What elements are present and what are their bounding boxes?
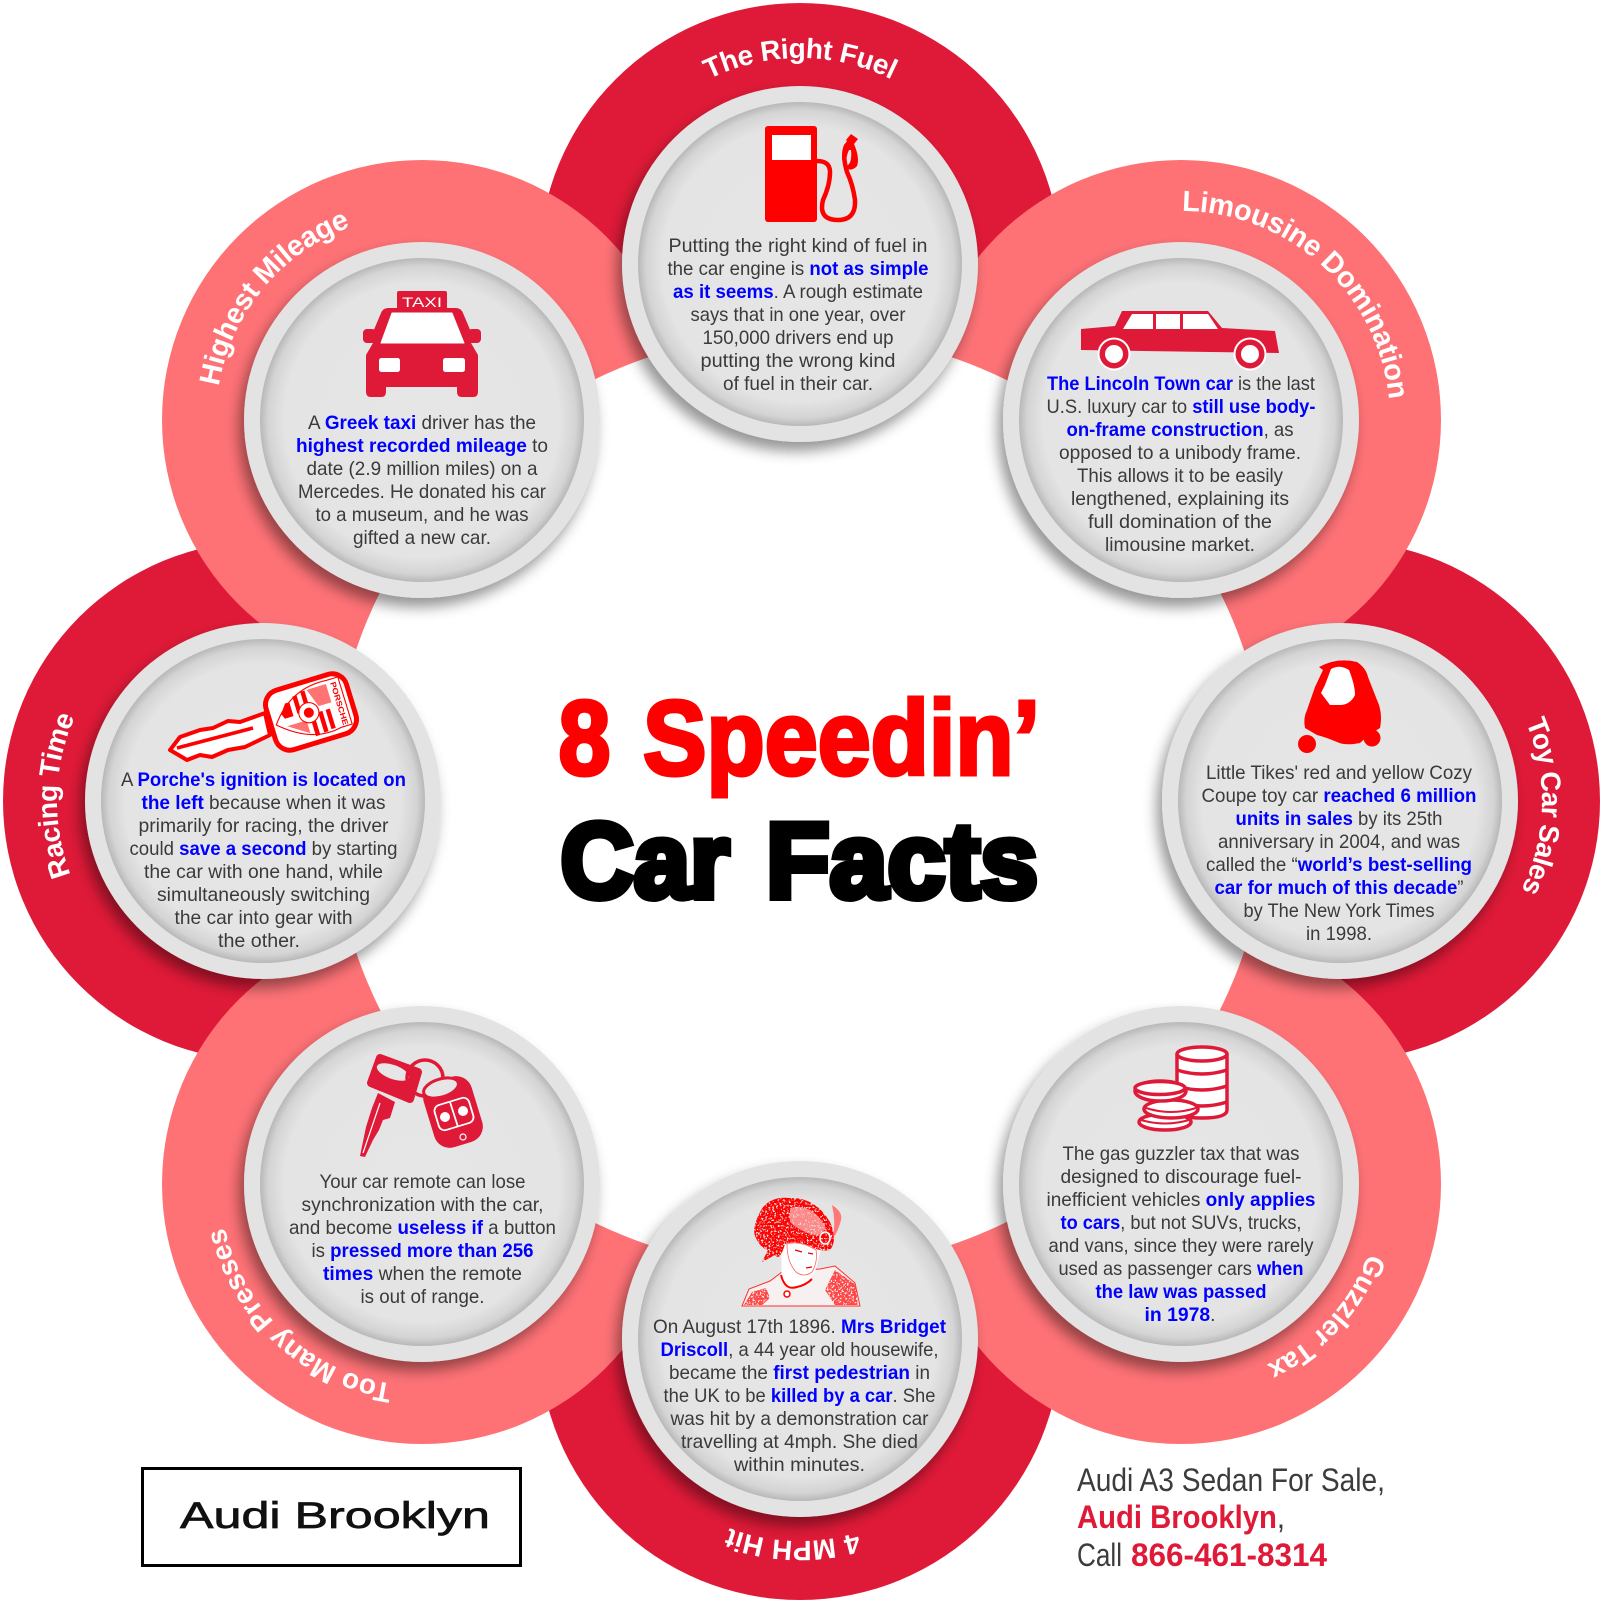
title: [558, 680, 1040, 920]
text: limousine domination: [1046, 373, 1316, 556]
panel: 4 mph hit: [608, 1160, 982, 1560]
text: limousine domination: The Lincoln Town car is the last: [1047, 373, 1316, 395]
text: too many presses: is out of range.: [360, 1286, 484, 1308]
contact text: 866-461-8314: [1131, 1537, 1327, 1573]
text: 4 mph hit: [653, 1316, 946, 1476]
text: toy car sales: Little Tikes' red and yellow Cozy: [1206, 762, 1472, 784]
circle: toy car sales: [1162, 623, 1518, 979]
text: 4 mph hit: became the first pedestrian in: [669, 1362, 930, 1384]
text: too many presses: and become useless if a button: [289, 1217, 556, 1239]
text: the right fuel: putting the wrong kind: [700, 350, 896, 372]
label: Highest Mileage: Highest Mileage: [199, 214, 348, 384]
title: Speedin’: [643, 680, 1040, 798]
text: racing time: primarily for racing, the driver: [138, 815, 389, 837]
label: Racing Time: Racing Time: [38, 714, 73, 880]
text: limousine domination: This allows it to be easily: [1077, 465, 1283, 487]
text: toy car sales: in 1998.: [1306, 923, 1372, 945]
text: guzzler tax: used as passenger cars when: [1058, 1258, 1304, 1280]
text: highest mileage: gifted a new car.: [353, 527, 491, 549]
text: too many presses: synchronization with the car,: [302, 1194, 544, 1216]
text: racing time: the left because when it was: [142, 792, 386, 814]
text: highest mileage: A Greek taxi driver has the: [308, 412, 536, 434]
text: limousine domination: limousine market.: [1105, 534, 1255, 556]
text: the right fuel: 150,000 drivers end up: [702, 327, 894, 349]
panel: limousine domination: [988, 190, 1404, 616]
icon: coin stacks: [1135, 1047, 1227, 1130]
icon: toy car: [1298, 660, 1381, 753]
text: highest mileage: Mercedes. He donated his car: [298, 481, 546, 503]
text: highest mileage: date (2.9 million miles) on a: [306, 458, 538, 480]
text: the right fuel: the car engine is not as simple: [668, 258, 929, 280]
text: toy car sales: anniversary in 2004, and was: [1218, 831, 1460, 853]
contact text: Call: [1077, 1537, 1122, 1573]
text: 4 mph hit: the UK to be killed by a car. She: [664, 1385, 936, 1407]
logo box: Audi Brooklyn: [142, 1468, 520, 1566]
text: guzzler tax: [1046, 1143, 1316, 1326]
panel: racing time: [38, 623, 446, 998]
icon: porsche key: PORSCHE: [328, 681, 350, 726]
text: highest mileage: to a museum, and he was: [316, 504, 529, 526]
text: limousine domination: lengthened, explaining its: [1071, 488, 1289, 510]
label: Limousine Domination: Limousine Domination: [1184, 190, 1404, 398]
text: toy car sales: Coupe toy car reached 6 million: [1202, 785, 1476, 807]
label: The Right Fuel: The Right Fuel: [701, 38, 898, 79]
text: toy car sales: car for much of this decade”: [1214, 877, 1463, 899]
text: guzzler tax: the law was passed: [1096, 1281, 1266, 1303]
contact text: [1077, 1462, 1385, 1573]
panel: the right fuel: [608, 38, 982, 460]
icon: taxi: TAXI: [402, 294, 442, 310]
circle: the right fuel: [622, 86, 978, 442]
text: 4 mph hit: Driscoll, a 44 year old housewife,: [660, 1339, 938, 1361]
text: racing time: simultaneously switching: [157, 884, 370, 906]
text: racing time: [121, 769, 406, 952]
text: the right fuel: of fuel in their car.: [723, 373, 873, 395]
text: racing time: the other.: [218, 930, 300, 952]
text: limousine domination: full domination of the: [1088, 511, 1272, 533]
title: Car: [560, 800, 730, 920]
text: guzzler tax: in 1978.: [1144, 1304, 1216, 1326]
text: racing time: A Porche's ignition is located on: [121, 769, 406, 791]
logo box: Audi Brooklyn: Audi Brooklyn: [180, 1495, 490, 1536]
text: toy car sales: units in sales by its 25th: [1236, 808, 1442, 830]
label: Toy Car Sales: Toy Car Sales: [1523, 715, 1561, 894]
contact text: Audi Brooklyn,: [1077, 1499, 1285, 1535]
text: too many presses: [289, 1171, 556, 1308]
text: toy car sales: [1202, 762, 1476, 945]
text: the right fuel: says that in one year, over: [690, 304, 906, 326]
text: toy car sales: by The New York Times: [1244, 900, 1435, 922]
text: too many presses: times when the remote: [323, 1263, 522, 1285]
text: the right fuel: [668, 235, 929, 395]
panel: highest mileage: [199, 214, 604, 616]
text: 4 mph hit: travelling at 4mph. She died: [681, 1431, 918, 1453]
circle: highest mileage: [244, 242, 600, 598]
text: 4 mph hit: was hit by a demonstration car: [670, 1408, 929, 1430]
panel: guzzler tax: [988, 1006, 1384, 1380]
text: racing time: could save a second by starting: [130, 838, 398, 860]
text: the right fuel: as it seems. A rough estimate: [673, 281, 923, 303]
panel: too many presses: [212, 1006, 604, 1403]
icon: victorian woman engraving: [742, 1198, 860, 1306]
circle: guzzler tax: [1003, 1006, 1359, 1362]
text: highest mileage: highest recorded mileage to: [296, 435, 548, 457]
panel: toy car sales: [1148, 622, 1561, 998]
text: 4 mph hit: On August 17th 1896. Mrs Bridget: [653, 1316, 946, 1338]
text: toy car sales: called the “world’s best-selling: [1206, 854, 1472, 876]
text: limousine domination: on-frame construction, as: [1066, 419, 1294, 441]
text: guzzler tax: The gas guzzler tax that was: [1062, 1143, 1300, 1165]
text: the right fuel: Putting the right kind of fuel in: [668, 235, 928, 257]
title: 8: [558, 680, 610, 798]
contact text: Audi A3 Sedan For Sale,: [1077, 1462, 1385, 1498]
icon: limousine: [1081, 311, 1279, 370]
title: Facts: [766, 800, 1038, 920]
text: racing time: the car with one hand, while: [144, 861, 383, 883]
text: too many presses: Your car remote can lose: [320, 1171, 526, 1193]
text: racing time: the car into gear with: [174, 907, 352, 929]
text: limousine domination: opposed to a unibody frame.: [1059, 442, 1301, 464]
circle: limousine domination: [1003, 242, 1359, 598]
icon: porsche key: [170, 670, 360, 760]
text: limousine domination: U.S. luxury car to still use body-: [1046, 396, 1316, 418]
icon: taxi: [363, 291, 481, 397]
icon: fuel pump: [765, 126, 858, 222]
text: 4 mph hit: within minutes.: [733, 1454, 865, 1476]
text: too many presses: is pressed more than 256: [312, 1240, 534, 1262]
circle: racing time: [85, 623, 441, 979]
label: Guzzler Tax: Guzzler Tax: [1266, 1257, 1384, 1378]
icon: car keys and remote: [360, 1058, 487, 1157]
text: guzzler tax: inefficient vehicles only applies: [1046, 1189, 1316, 1211]
label: Too Many Presses: Too Many Presses: [212, 1230, 390, 1403]
text: highest mileage: [296, 412, 548, 549]
text: guzzler tax: and vans, since they were rarely: [1048, 1235, 1314, 1257]
text: guzzler tax: designed to discourage fuel-: [1060, 1166, 1302, 1188]
circle: too many presses: [244, 1006, 600, 1362]
label: 4 MPH Hit: 4 MPH Hit: [724, 1528, 859, 1560]
circle: 4 mph hit: [622, 1161, 978, 1517]
text: guzzler tax: to cars, but not SUVs, trucks,: [1060, 1212, 1302, 1234]
